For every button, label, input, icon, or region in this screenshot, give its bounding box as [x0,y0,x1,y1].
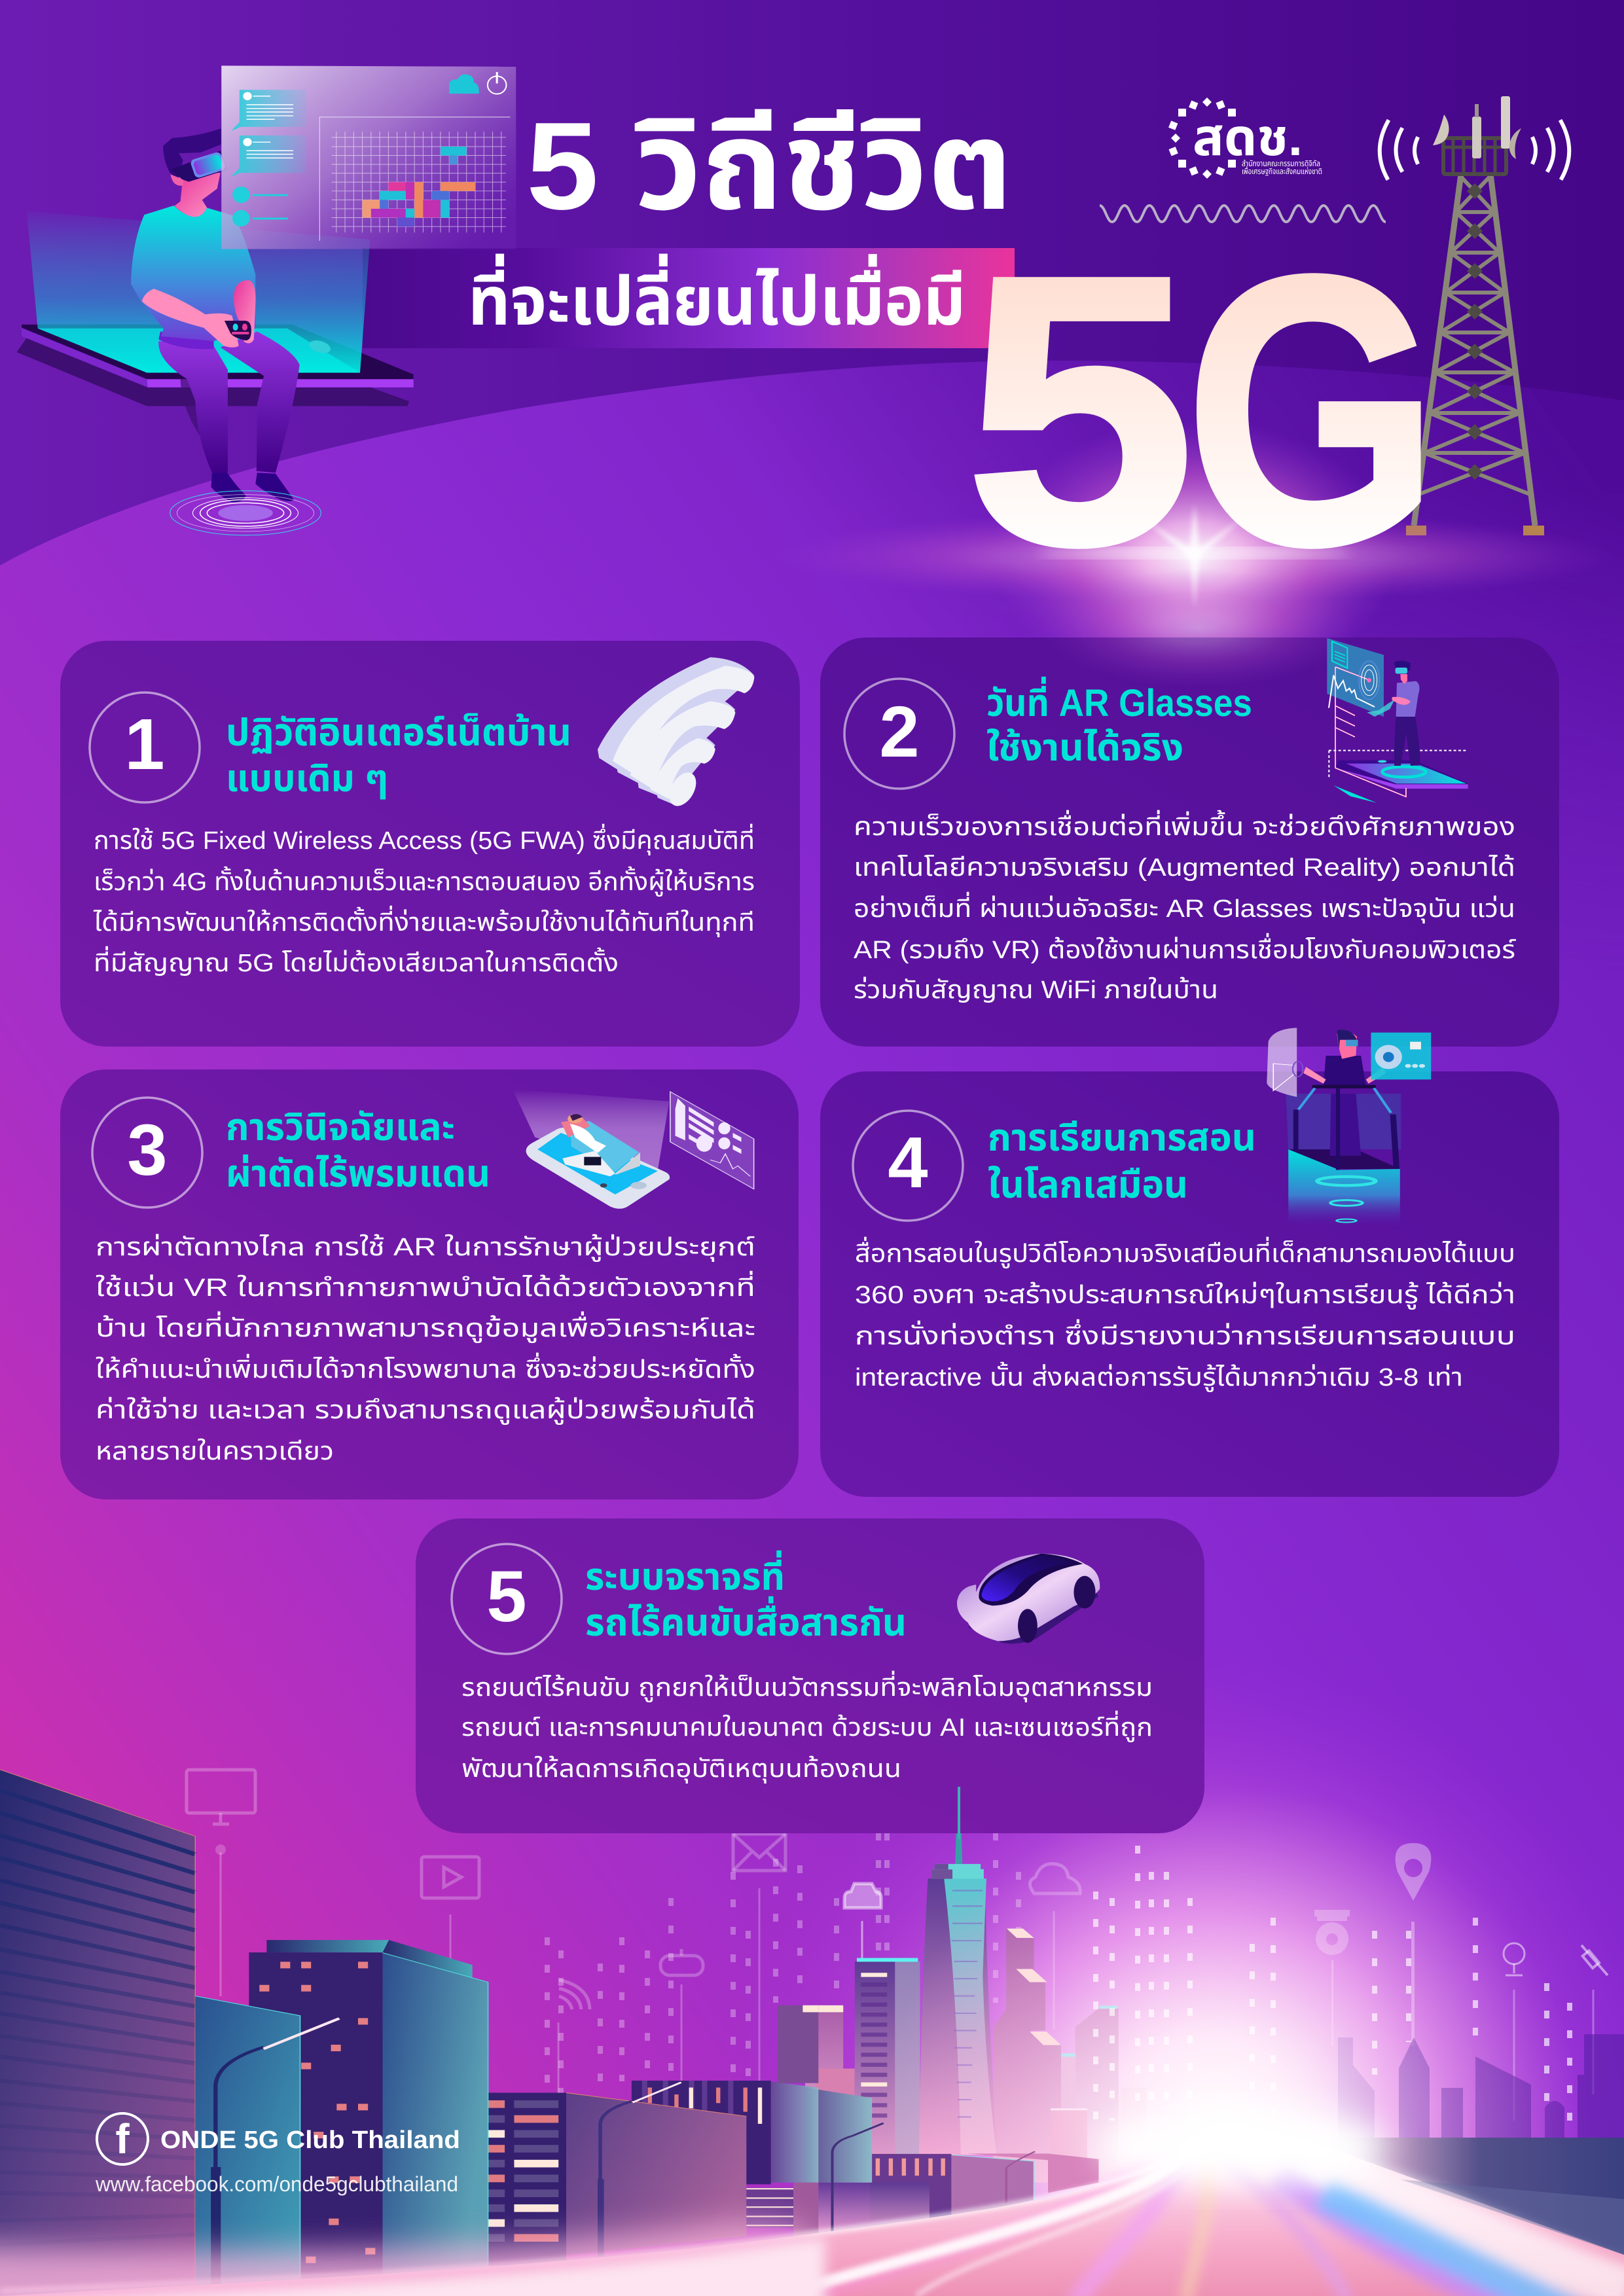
panel 4 body text: 360 องศา จะสร้างประสบการณ์ใหม่ๆในการเรียนรู้ ได้ดีกว่า [855,1282,1515,1310]
panel 5 body text: รถยนต์ และการคมนาคมในอนาคต ด้วยระบบ AI และเซนเซอร์ที่ถูก [461,1710,1153,1742]
panel 2 body text: ร่วมกับสัญญาณ WiFi ภายในบ้าน [854,977,1218,1004]
number badge 2 [844,679,954,789]
icon: monitor [187,1770,255,1996]
icon: facebook [97,2113,148,2164]
icon: facebook: f [115,2115,130,2162]
panel 2 heading: วันที่ AR Glasses [986,676,1252,725]
panel 1 body text: ที่มีสัญญาณ 5G โดยไม่ต้องเสียเวลาในการติดตั้ง [94,946,619,977]
panel 1 body text: เร็วกว่า 4G ทั้งในด้านความเร็วและการตอบสนอง อีกทั้งผู้ให้บริการ [94,866,755,897]
5G heading: G [1185,196,1439,624]
number badge 4: 4 [888,1122,928,1203]
icon: car [844,1884,881,1964]
neck and head [174,173,221,217]
illustration: patient on phone [513,1089,754,1209]
icon: mail [733,1834,785,2081]
logo: ONDE sdch: สดช. [1193,109,1303,166]
logo: ONDE sdch: สำนักงานคณะกรรมการดิจิทัล [1242,159,1320,168]
icon: wifi [598,657,754,808]
left striped building [0,1770,195,2296]
panel 3 body text: หลายรายในคราวเดียว [96,1438,334,1465]
signal wave [1100,206,1386,222]
controller [225,321,251,340]
road with light trails [0,2108,1624,2296]
number badge 1 [90,692,200,802]
title [468,97,1013,340]
icon: self-driving car [957,1554,1100,1643]
panel 3: remote surgery [60,1069,799,1499]
footer: facebook: ONDE 5G Club Thailand [160,2126,460,2154]
number badge 2: 2 [879,692,920,772]
rings [170,491,321,535]
panel 3 body text [96,1234,755,1465]
icon: location pin [1396,1843,1431,2046]
arms [234,280,255,344]
icon: gamepad [660,1949,703,2081]
panel 5 heading [585,1550,907,1644]
towers midground [805,1787,1188,2183]
panel 5 body text: พัฒนาให้ลดการเกิดอุบัติเหตุบนท้องถนน [461,1755,901,1784]
teal building with street lamp [195,1996,339,2296]
icon: wifi signal [558,1980,590,2094]
panel 5 heading: รถไร้คนขับสื่อสารกัน [585,1596,907,1644]
building: windows block [488,2092,566,2265]
panel 1 heading: แบบเดิม ๆ [226,757,388,800]
panel 3 body text: ใช้แว่น VR ในการทำกายภาพบำบัดได้ด้วยตัวเองจากที่ [96,1270,755,1302]
panel 5: autonomous cars [416,1518,1204,1833]
panel 2 heading [986,676,1252,769]
panel 4 body text: interactive นั้น ส่งผลต่อการรับรู้ได้มากกว่าเดิม 3-8 เท่า [855,1361,1463,1392]
icon: fan [1504,1943,1525,2121]
5G heading: 5 [965,196,1195,624]
skyline right silhouettes [1338,2034,1624,2138]
panel 1 heading [226,711,571,800]
icon: video play [422,1857,479,1964]
panel 5 heading: ระบบจราจรที่ [585,1550,785,1598]
panel 2: AR glasses [820,569,1559,1047]
panel 4 heading: การเรียนการสอน [988,1117,1256,1159]
icon: cctv camera [1314,1910,1350,2045]
number badge 3 [92,1098,202,1208]
tower spire over panel 5 [958,1787,960,1839]
panel 1 heading: ปฏิวัติอินเตอร์เน็ตบ้าน [226,711,571,754]
panel 3 body text: การผ่าตัดทางไกล การใช้ AR ในการรักษาผู้ป่วยประยุกต์ [96,1234,755,1262]
panel 2 body text [854,810,1516,1004]
shoes [211,473,294,502]
banner [363,248,1015,348]
panel 4 heading: ในโลกเสมือน [988,1164,1188,1206]
logo: ONDE sdch [1168,98,1322,179]
number badge 1: 1 [124,704,165,785]
panel 2 body text: เทคโนโลยีความจริงเสริม (Augmented Reality) ออกมาได้ [854,854,1515,882]
panel 5 body text: รถยนต์ไร้คนขับ ถูกยกให้เป็นนวัตกรรมที่จะพลิกโฉมอุตสาหกรรม [461,1670,1153,1702]
panel 1 body text: ได้มีการพัฒนาให้การติดตั้งที่ง่ายและพร้อมใช้งานได้ทันทีในทุกที [93,905,755,937]
number badge 3: 3 [127,1110,168,1191]
tower [1380,96,1569,535]
dark tower [249,1940,488,2284]
number badge 5 [452,1544,562,1654]
footer: facebook [95,2113,460,2196]
panel 3 heading [226,1106,490,1195]
legs [158,341,228,473]
panel 3 heading: ผ่าตัดไร้พรมแดน [226,1153,490,1195]
panel 2 heading: ใช้งานได้จริง [986,726,1183,769]
light flare [776,419,1614,694]
city background: dotted data columns right [1096,1846,1570,2134]
city foreground buildings [0,1770,818,2296]
panel 4 body text: สื่อการสอนในรูปวิดีโอความจริงเสมือนที่เด็กสามารถมองได้แบบ [855,1236,1515,1268]
midground low buildings [805,2088,1098,2238]
illustration: AR user [1327,638,1468,803]
building: far right mid block [632,2081,771,2184]
icon: cloud [1030,1864,1080,2029]
logo: ONDE sdch: เพื่อเศรษฐกิจและสังคมแห่งชาติ [1242,166,1322,176]
panel 1: home internet [60,641,800,1047]
horizon glow [694,1623,1624,2296]
illustration: VR classroom [1267,1028,1431,1225]
panel 4: virtual learning [820,1028,1559,1497]
city background: dotted data columns left [547,1833,1019,2094]
title: 5 วิถีชีวิต [526,97,1013,236]
number badge 5: 5 [486,1556,527,1637]
title: ที่จะเปลี่ยนไปเมื่อมี [468,254,965,340]
holographic dashboard [221,65,516,249]
bottom road fog [0,2222,825,2296]
panel 3 body text: ค่าใช้จ่าย และเวลา รวมถึงสามารถดูแลผู้ป่วยพร้อมกันได้ [96,1397,755,1425]
footer: facebook: www.facebook.com/onde5gclubthailand [95,2172,458,2196]
street lamp 2 [598,2083,681,2257]
panel 2 body text: อย่างเต็มที่ ผ่านแว่นอัจฉริยะ AR Glasses เพราะปัจจุบัน แว่น [854,891,1515,924]
panel 5 body text [461,1670,1153,1784]
panel 2 body text: AR (รวมถึง VR) ต้องใช้งานผ่านการเชื่อมโยงกับคอมพิวเตอร์ [854,933,1516,964]
icon: syringe [1581,1945,1608,2094]
city icons [187,1770,1608,2121]
illustration: VR person on tablet [17,65,516,535]
torso [131,206,255,341]
horizon wash over towers [871,1780,1585,2296]
panel 3 body text: ให้คำแนะนำเพิ่มเติมได้จากโรงพยาบาล ซึ่งจะช่วยประหยัดทั้ง [96,1352,755,1384]
panel 3 heading: การวินิจฉัยและ [226,1106,455,1149]
panel 1 body text: การใช้ 5G Fixed Wireless Access (5G FWA) ซึ่งมีคุณสมบัติที่ [94,823,755,855]
panel 2 body text: ความเร็วของการเชื่อมต่อที่เพิ่มขึ้น จะช่วยดึงศักยภาพของ [854,810,1515,841]
panel 4 body text: การนั่งท่องตำรา ซึ่งมีรายงานว่าการเรียนการสอนแบบ [855,1319,1515,1350]
panel 1 body text [93,823,755,977]
panel 4 heading [988,1117,1256,1206]
panel 4 body text [855,1236,1515,1392]
panel 3 body text: บ้าน โดยที่นักกายภาพสามารถดูข้อมูลเพื่อวิเคราะห์และ [96,1311,755,1343]
number badge 4 [853,1111,963,1221]
5G heading [974,273,1421,549]
